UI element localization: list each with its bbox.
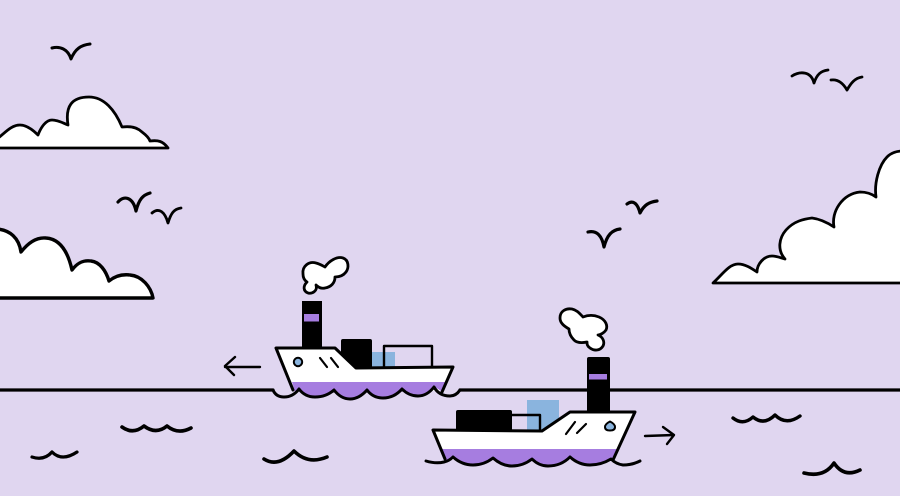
hull bbox=[276, 348, 453, 391]
outlined container bbox=[512, 415, 540, 430]
outlined container bbox=[384, 346, 432, 367]
ship: left bbox=[225, 258, 460, 399]
blue container bbox=[372, 352, 395, 368]
bird: top right pair bbox=[792, 70, 862, 90]
wave: upper right bbox=[733, 415, 800, 422]
bird: top left bbox=[52, 44, 90, 59]
funnel band bbox=[589, 374, 607, 380]
bird: centre pair bbox=[588, 201, 657, 247]
funnel band bbox=[304, 314, 319, 322]
bird: mid left pair bbox=[118, 193, 181, 223]
arrow: left bbox=[225, 357, 260, 375]
cloud: top left bbox=[0, 97, 168, 148]
hull outline bbox=[433, 412, 635, 460]
wave: upper left bbox=[122, 426, 191, 431]
arrow: right bbox=[645, 427, 674, 444]
hull waterline bbox=[292, 382, 445, 399]
smoke bbox=[560, 309, 607, 350]
cloud: middle left bbox=[0, 229, 153, 298]
wave: centre bbox=[264, 451, 327, 462]
smoke bbox=[303, 258, 348, 293]
wave: lower right bbox=[804, 463, 860, 474]
hull outline bbox=[276, 348, 453, 392]
funnel bbox=[587, 357, 610, 413]
black container bbox=[456, 410, 512, 431]
windows bbox=[566, 422, 586, 434]
cloud: right bbox=[713, 151, 900, 283]
porthole bbox=[605, 422, 615, 430]
hull wave edge bbox=[273, 387, 460, 399]
black container bbox=[341, 339, 372, 368]
funnel bbox=[302, 301, 322, 349]
hull bbox=[433, 412, 635, 460]
hull wave edge bbox=[426, 457, 640, 466]
horizon line bbox=[0, 388, 900, 392]
blue container bbox=[527, 400, 559, 430]
wave: lower left bbox=[32, 452, 77, 458]
hull waterline bbox=[442, 449, 618, 466]
porthole bbox=[294, 358, 302, 366]
windows bbox=[320, 358, 338, 367]
ship: right bbox=[426, 309, 674, 466]
